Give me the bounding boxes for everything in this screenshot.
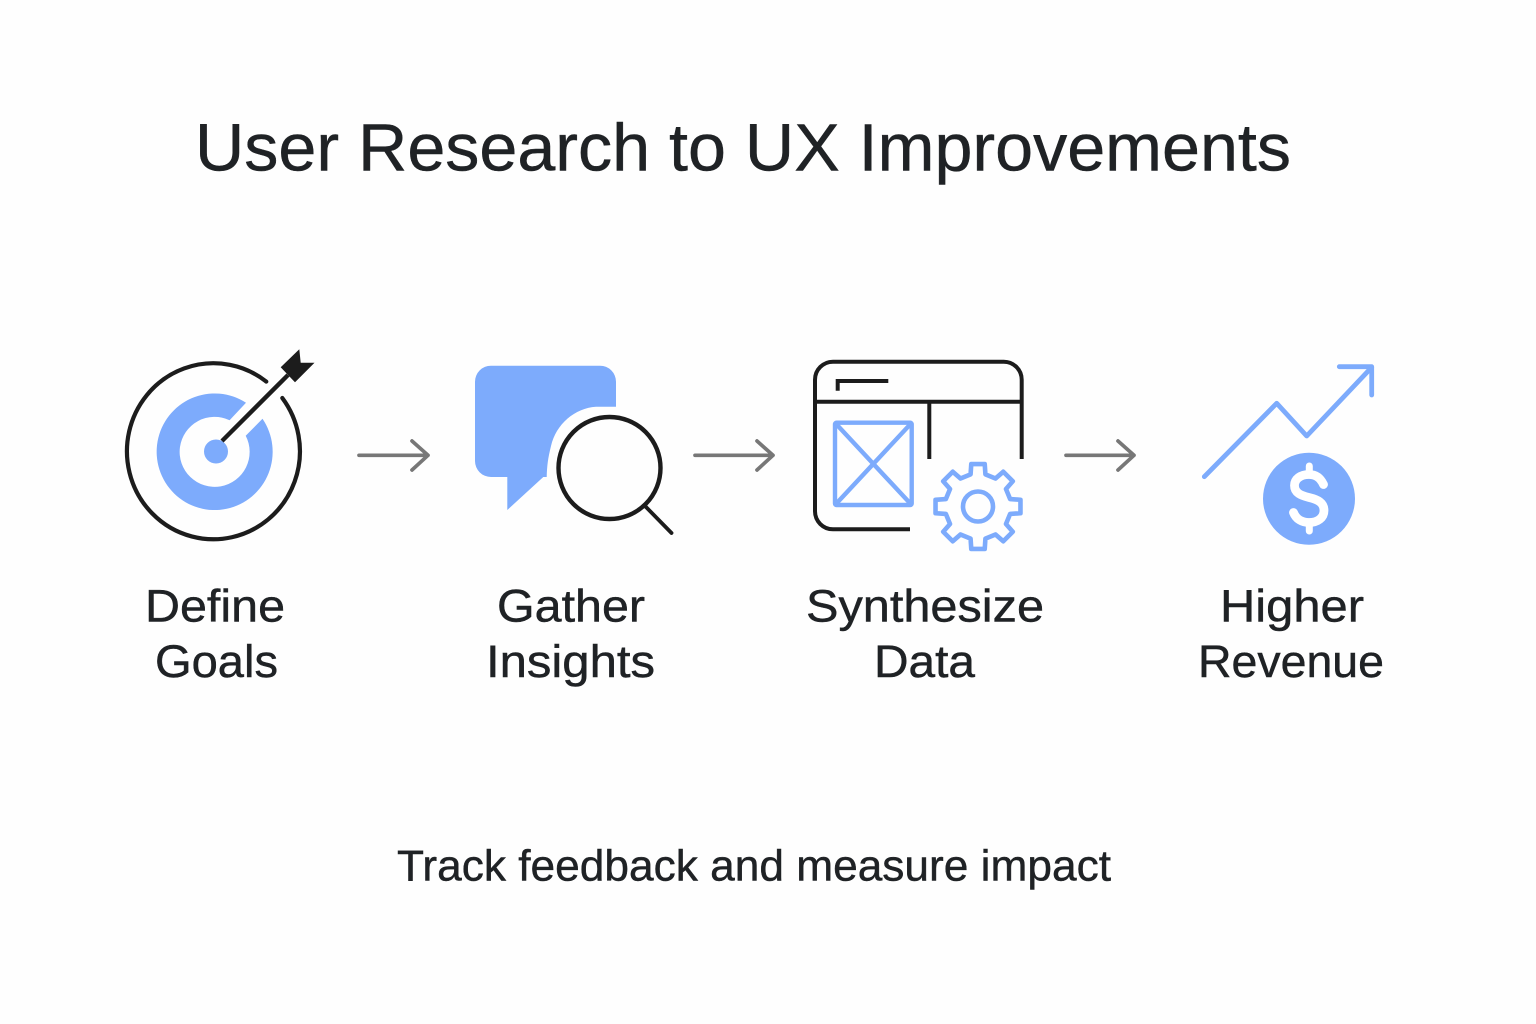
icon: target with arrow [127, 349, 314, 539]
label: define goals: Define [145, 581, 285, 632]
label: define goals: Goals [155, 636, 278, 687]
icon: wireframe window and gear [815, 362, 1022, 549]
icon: speech bubble and magnifier [475, 366, 672, 533]
title: User Research to UX Improvements [195, 110, 1291, 186]
step 1: define goals [127, 349, 314, 687]
label: define goals [145, 581, 285, 687]
label: gather insights: Insights [486, 636, 655, 687]
label: synthesize data [806, 581, 1044, 687]
label: higher revenue [1198, 581, 1384, 687]
arrow: synthesize to revenue [1066, 441, 1134, 470]
label: higher revenue: Higher [1220, 581, 1364, 632]
label: synthesize data: Data [874, 636, 976, 687]
arrow: gather to synthesize [695, 441, 773, 470]
footer caption: Track feedback and measure impact [397, 842, 1111, 890]
step 3: synthesize data [806, 362, 1044, 687]
step 2: gather insights [475, 366, 672, 687]
icon: growth chart and dollar coin [1204, 367, 1372, 545]
label: gather insights [486, 581, 655, 687]
label: gather insights: Gather [497, 581, 645, 632]
arrow: define to gather [359, 441, 428, 470]
step 4: higher revenue [1198, 367, 1384, 687]
label: synthesize data: Synthesize [806, 581, 1044, 632]
label: higher revenue: Revenue [1198, 636, 1384, 687]
